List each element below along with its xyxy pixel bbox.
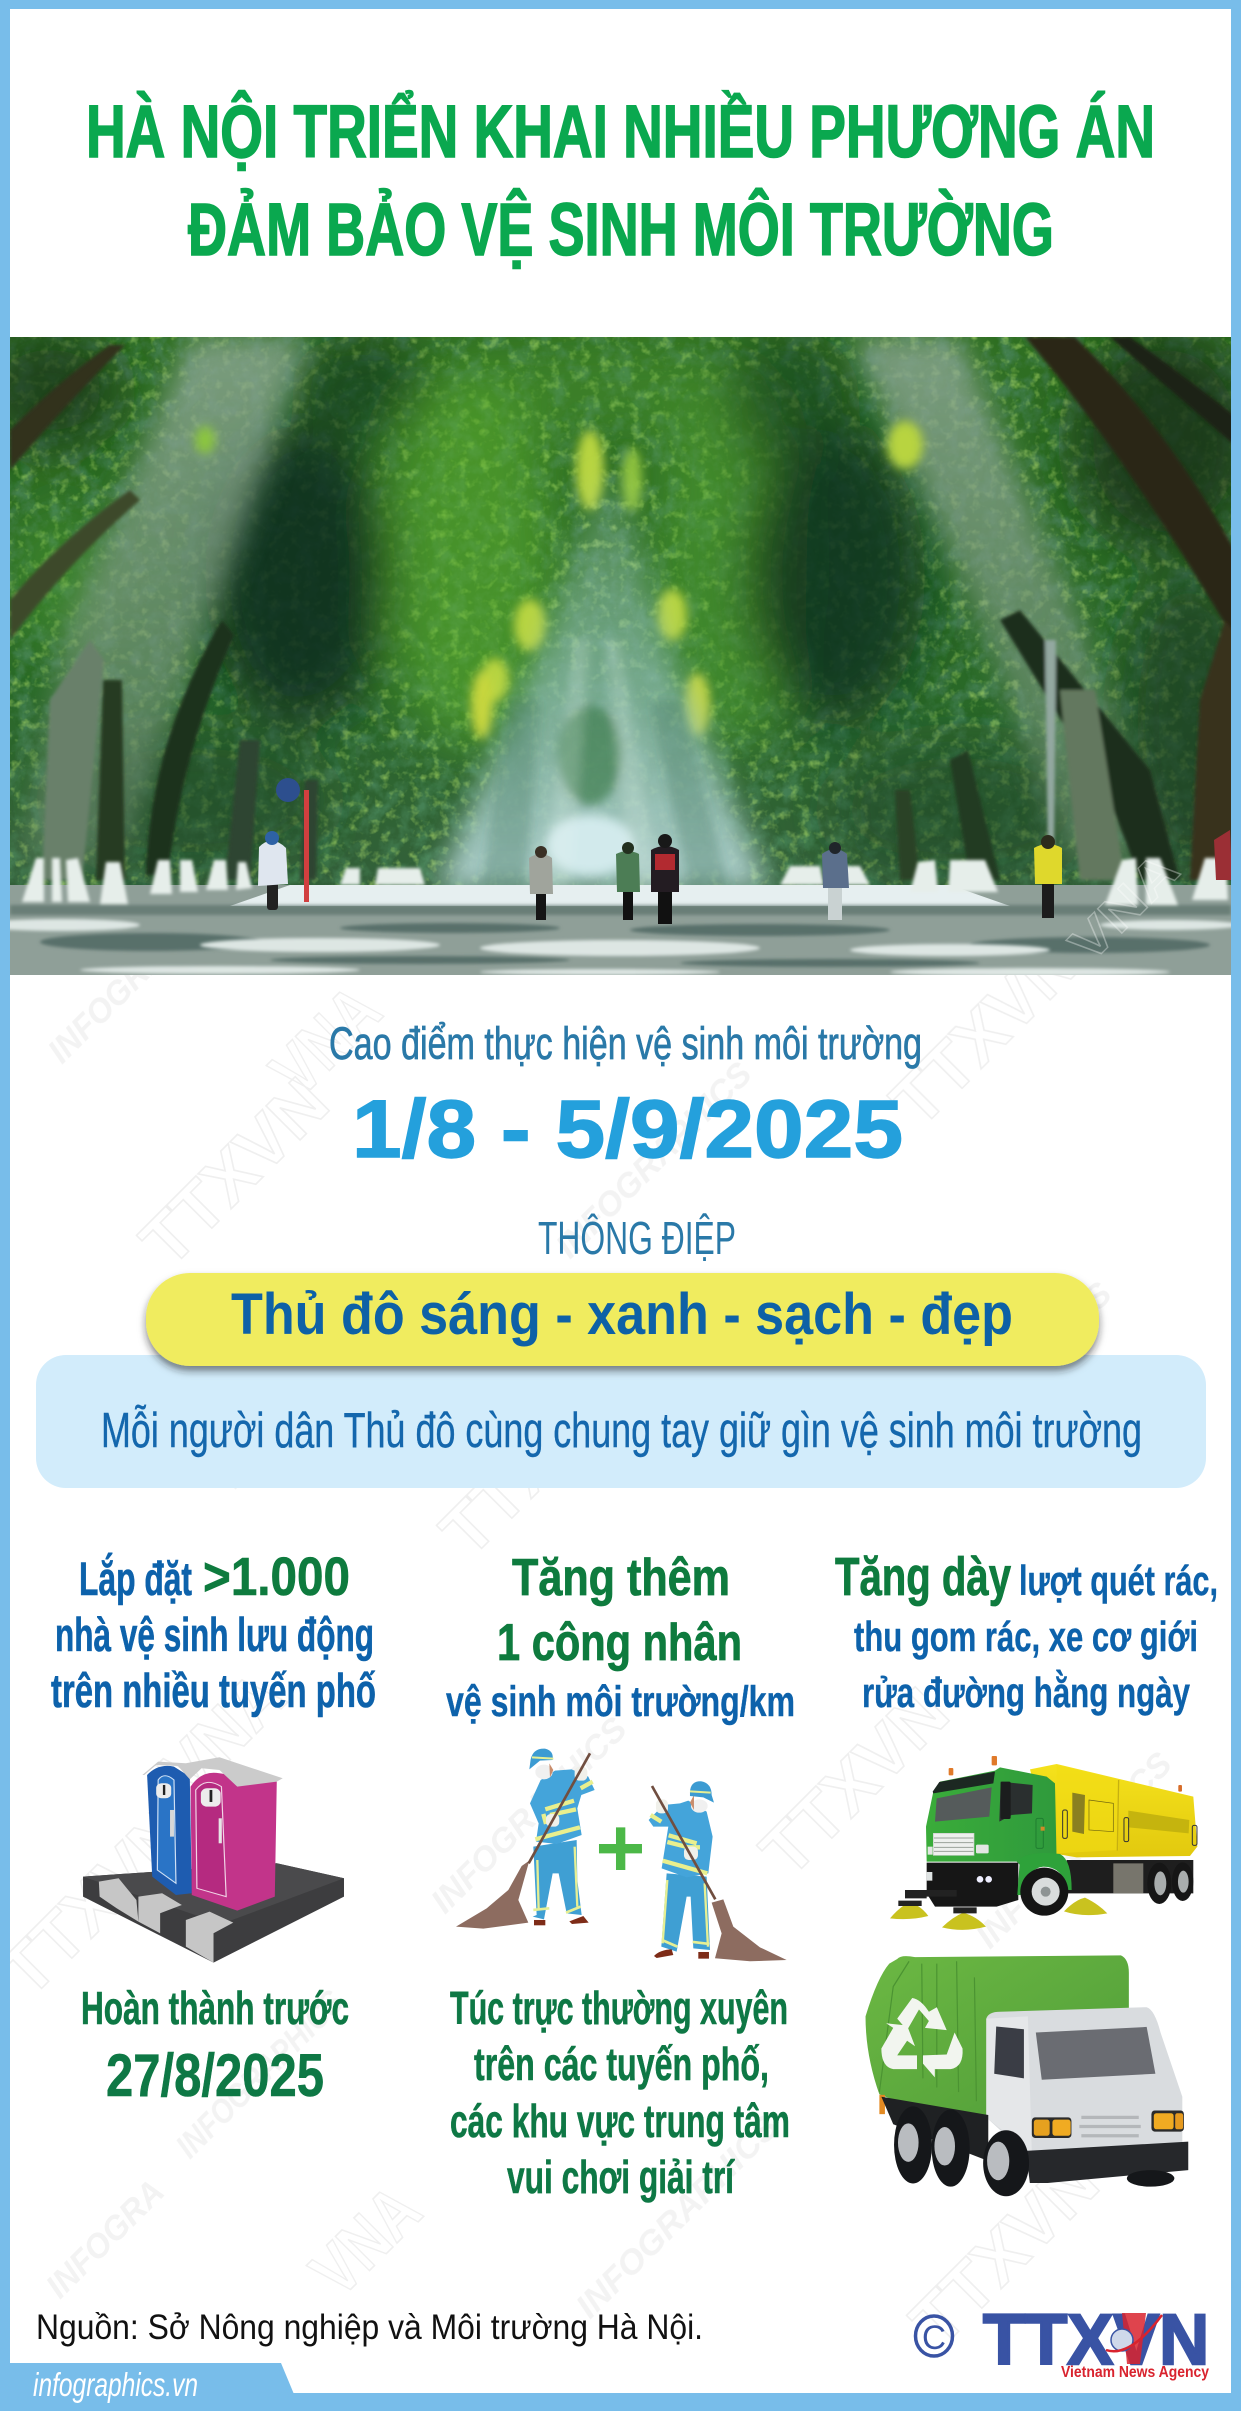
- column 2 heading: 1 công nhân: [497, 1614, 742, 1672]
- watermarks: INFOGRAPHICS: [41, 867, 245, 1071]
- date range: 1/8 - 5/9/2025: [352, 1084, 903, 1175]
- watermarks: VNA: [255, 971, 395, 1111]
- watermarks: INFOGRAPHICS: [909, 1275, 1120, 1486]
- source: Nguồn: Sở Nông nghiệp và Môi trường Hà Nội.: [36, 2308, 703, 2347]
- worker duties text: [450, 1982, 790, 2203]
- column 2 heading: [446, 1549, 795, 1726]
- column 2 heading: Tăng thêm: [512, 1549, 730, 1607]
- footer tab: website: infographics.vn: [33, 2366, 198, 2403]
- worker duties text: vui chơi giải trí: [507, 2151, 736, 2203]
- trunks: [10, 337, 1240, 880]
- central light shaft: [435, 480, 770, 890]
- watermarks: TTXVN: [875, 923, 1093, 1141]
- worker duties text: trên các tuyến phố,: [474, 2038, 769, 2090]
- watermarks: INFOGRA: [39, 2173, 172, 2306]
- subheading: peak period: Cao điểm thực hiện vệ sinh môi trường: [329, 1018, 922, 1069]
- column 2: additional workers: [446, 1549, 795, 2203]
- watermarks: INFOGRAPHICS: [169, 1983, 351, 2166]
- column 1 heading: Lắp đặt: [79, 1552, 192, 1605]
- label: message: THÔNG ĐIỆP: [538, 1212, 736, 1264]
- watermarks: VNA: [145, 1656, 300, 1811]
- icon: two street sweepers with plus sign: [456, 1749, 787, 1961]
- watermarks: TTXVN: [895, 2143, 1113, 2361]
- column 1: portable toilets: [51, 1547, 376, 2109]
- panel: pale blue message: [36, 1355, 1206, 1488]
- watermarks: VNA: [1015, 2026, 1170, 2181]
- light rays through the trees: [20, 337, 1160, 860]
- watermarks: TTXVN: [425, 1353, 643, 1571]
- column 3 heading: Tăng dày: [835, 1547, 1011, 1607]
- worker duties text: các khu vực trung tâm: [450, 2095, 790, 2147]
- watermarks: INFOGRAPHICS: [424, 1710, 635, 1921]
- column 3: more frequent cleaning: [835, 1547, 1218, 2196]
- watermarks: INFOGRAPHICS: [214, 1313, 396, 1496]
- watermarks: [0, 867, 1180, 2361]
- column 3 heading: [835, 1547, 1218, 1716]
- completion deadline: Hoàn thành trước: [81, 1982, 349, 2034]
- yellow slogan pill: [146, 1273, 1099, 1366]
- watermarks: INFOGRAPHICS: [969, 1745, 1180, 1956]
- icon: recycling arrows: [881, 1998, 963, 2077]
- worker duties text: Túc trực thường xuyên: [450, 1982, 788, 2034]
- sunlit yellow-green leaves: [195, 421, 923, 739]
- logo: copyright and TTXVN: TTXVN: [983, 2301, 1209, 2380]
- icon: garbage truck: [866, 1955, 1188, 2196]
- faint watermark on photo: VNA: [1058, 841, 1190, 973]
- icon: second worker: [649, 1781, 787, 1961]
- icon: road sweeper truck: [890, 1756, 1197, 1930]
- watermarks: INFOGRAPHICS: [549, 1055, 760, 1266]
- column 1 heading: trên nhiều tuyến phố: [51, 1664, 376, 1717]
- watermarks: INFOGRAPHICS: [569, 2108, 787, 2326]
- motorcyclists: [258, 778, 1232, 924]
- column 1 heading: >1.000: [203, 1547, 350, 1607]
- column 2 heading: vệ sinh môi trường/km: [446, 1678, 795, 1726]
- foliage light and dark masses: [0, 330, 1241, 880]
- title: [86, 90, 1155, 271]
- completion deadline: [81, 1982, 349, 2109]
- logo: copyright and TTXVN: C: [922, 2319, 946, 2357]
- road: [10, 885, 1231, 975]
- icon: plus sign: [599, 1827, 642, 1870]
- yellow slogan pill: Thủ đô sáng - xanh - sạch - đẹp: [231, 1282, 1013, 1347]
- footer tab: website: [0, 2363, 301, 2411]
- whitewashed tree bases: [22, 858, 1228, 905]
- watermarks: TTXVN: [125, 1063, 343, 1281]
- column 1 heading: nhà vệ sinh lưu động: [55, 1608, 374, 1661]
- icon: portable toilets on a platform: [83, 1757, 344, 1963]
- logo: copyright and TTXVN: Vietnam News Agency: [1061, 2364, 1209, 2381]
- watermarks: TTXVN: [745, 1673, 963, 1891]
- column 1 heading: [51, 1547, 376, 1717]
- icon: first worker: [456, 1749, 595, 1929]
- watermarks: VNA: [295, 2171, 435, 2311]
- completion deadline: 27/8/2025: [106, 2042, 324, 2109]
- photo: tree-lined street: [0, 330, 1241, 976]
